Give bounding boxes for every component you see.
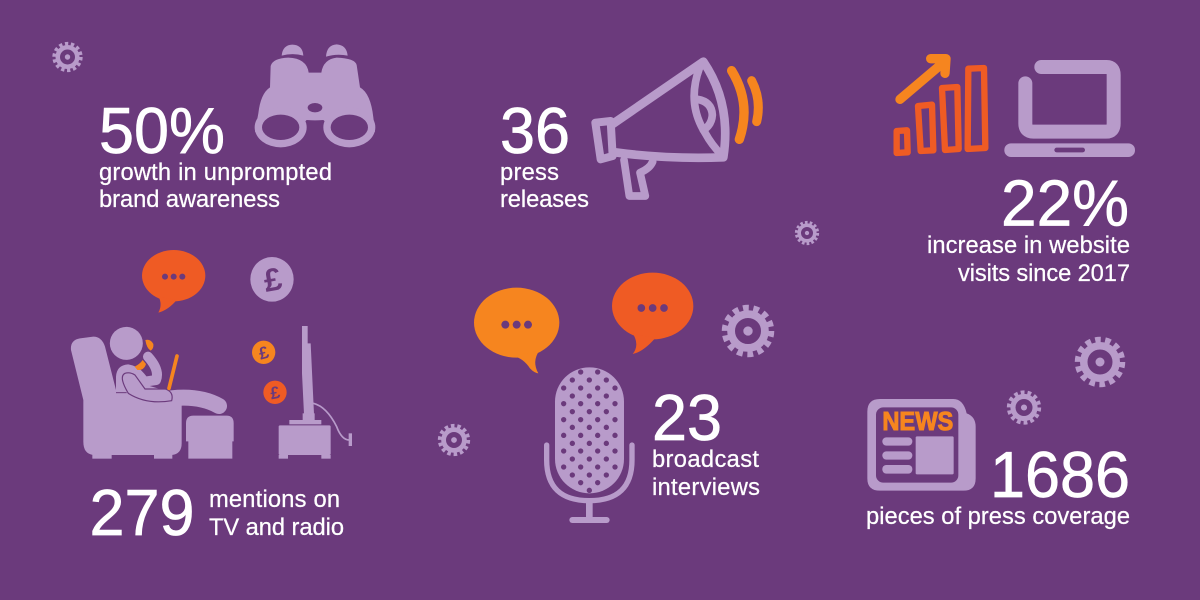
figure: 36: 36 bbox=[500, 94, 570, 167]
text: broadcast interviews: interviews bbox=[652, 475, 760, 501]
text: pieces of press coverage: pieces of press coverage bbox=[866, 504, 1130, 530]
icon: orange pound coin: £ bbox=[257, 342, 271, 364]
icon: small gear above news figure bbox=[1009, 393, 1039, 422]
panel: press coverage bbox=[866, 399, 1130, 530]
icon: newspaper bbox=[867, 399, 976, 491]
text: growth in unprompted brand awareness: growth in unprompted bbox=[99, 160, 332, 186]
text: mentions on TV and radio: mentions on bbox=[209, 487, 340, 513]
text: mentions on TV and radio: TV and radio bbox=[209, 515, 344, 541]
figure: 1686: 1686 bbox=[990, 438, 1130, 511]
icon: gear centre right bbox=[796, 222, 818, 244]
icon: speech bubble bbox=[142, 250, 205, 313]
icon: orange speech bubble bbox=[474, 288, 559, 373]
icon: rising bar chart with arrow bbox=[897, 59, 985, 153]
figure: 23: 23 bbox=[652, 381, 722, 454]
icon: large pound coin: £ bbox=[261, 260, 285, 299]
icon: large pound coin bbox=[250, 257, 294, 302]
icon: large gear lower right bbox=[1078, 340, 1122, 384]
figure: 279: 279 bbox=[90, 476, 194, 549]
icon: orange pound coin bbox=[252, 341, 275, 364]
icon: large gear beside speech bubbles bbox=[725, 308, 771, 354]
icon: gear left of microphone bbox=[440, 426, 468, 454]
text: press releases: releases bbox=[500, 187, 589, 213]
text: growth in unprompted brand awareness: brand awareness bbox=[99, 187, 280, 213]
panel: brand awareness bbox=[99, 44, 375, 213]
icon: footstool bbox=[186, 416, 234, 459]
icon: microphone bbox=[547, 367, 632, 520]
icon: armchair bbox=[71, 337, 182, 459]
text: increase in website visits since 2017: increase in website bbox=[927, 233, 1130, 259]
icon: binoculars bbox=[255, 44, 375, 147]
text: increase in website visits since 2017: visits since 2017 bbox=[958, 261, 1130, 287]
icon: red pound coin bbox=[263, 381, 287, 404]
text: broadcast interviews: broadcast bbox=[652, 447, 759, 473]
figure: 50%: 50% bbox=[99, 94, 225, 167]
icon: red pound coin: £ bbox=[269, 382, 282, 403]
panel: website visits bbox=[897, 59, 1135, 287]
panel: broadcast interviews bbox=[474, 273, 760, 520]
icon: megaphone bbox=[595, 62, 758, 196]
panel: press releases bbox=[500, 62, 758, 213]
icon: television on stand bbox=[279, 326, 352, 459]
icon: seated person bbox=[110, 327, 219, 406]
text: press releases: press bbox=[500, 160, 559, 186]
icon: gear top left bbox=[54, 44, 81, 70]
icon: laptop bbox=[1004, 67, 1135, 157]
illustration: person in armchair watching TV bbox=[71, 250, 352, 459]
icon: red speech bubble bbox=[612, 273, 693, 354]
icon: newspaper: NEWS bbox=[882, 406, 953, 436]
panel: TV and radio mentions bbox=[71, 250, 352, 549]
figure: 22%: 22% bbox=[1001, 166, 1129, 240]
